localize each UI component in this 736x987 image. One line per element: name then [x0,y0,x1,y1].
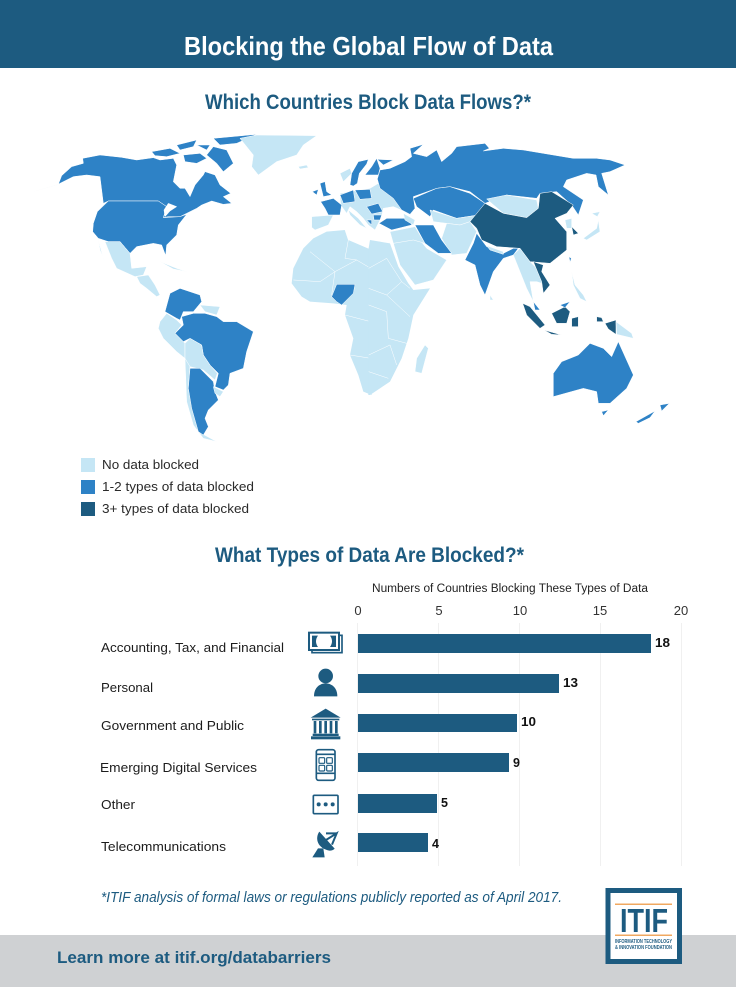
axis ticks [354,603,688,618]
heading: chart section: What Types of Data Are Blocked?* [215,544,525,567]
axis title: Numbers of Countries Blocking These Types of Data [372,583,649,595]
icon: government building [311,709,341,739]
axis ticks: 5 [435,603,443,618]
row: telecommunications: 4 [432,837,439,851]
row: personal: 13 [563,676,578,690]
ITIF logo: ITIF [620,902,668,939]
axis ticks: 20 [674,603,688,618]
row: emerging digital services: Emerging Digital Services [100,760,258,775]
icon: other dots [313,795,338,814]
row: accounting, tax, and financial: 18 [655,636,670,650]
row: government and public: Government and Public [101,718,245,733]
row: accounting, tax, and financial [101,634,670,655]
footer band [0,935,736,987]
map: Asia, east Africa and Oceania [368,143,669,423]
row: personal: Personal [101,680,153,695]
row: accounting, tax, and financial: Accounting, Tax, and Financial [101,640,284,655]
row: other: 5 [441,796,448,810]
footer link text: Learn more at itif.org/databarriers [57,948,331,967]
map: Americas and west Africa [33,134,372,442]
row: telecommunications: Telecommunications [101,839,227,854]
row: emerging digital services [100,753,520,775]
ITIF logo: INFORMATION TECHNOLOGY [615,939,673,945]
row: government and public [101,714,536,733]
row: telecommunications [101,833,439,854]
map: Europe [312,158,412,230]
map legend [81,458,254,516]
ITIF logo: & INNOVATION FOUNDATION [615,945,672,951]
title: Blocking the Global Flow of Data [184,31,553,61]
icon: smartphone [316,750,335,780]
legend: no data blocked: No data blocked [102,458,199,472]
axis ticks: 15 [593,603,607,618]
icon: person [314,669,337,696]
ITIF logo [608,890,680,962]
header banner [0,0,736,68]
axis ticks: 10 [513,603,527,618]
legend: 1-2 types: 1-2 types of data blocked [102,480,254,494]
bar chart [100,583,688,866]
footnote: *ITIF analysis of formal laws or regulations publicly reported as of April 2017. [101,890,562,906]
row: personal [101,674,578,695]
axis ticks: 0 [354,603,362,618]
icon: satellite dish [312,832,337,857]
row: other: Other [101,797,136,812]
legend: 3+ types: 3+ types of data blocked [102,502,249,516]
row: emerging digital services: 9 [513,756,520,770]
world map [33,134,669,442]
icon: money [309,633,342,653]
row: government and public: 10 [521,715,536,729]
row: other [101,794,448,813]
heading: map section: Which Countries Block Data Flows?* [205,91,532,114]
chart icons [309,633,342,857]
